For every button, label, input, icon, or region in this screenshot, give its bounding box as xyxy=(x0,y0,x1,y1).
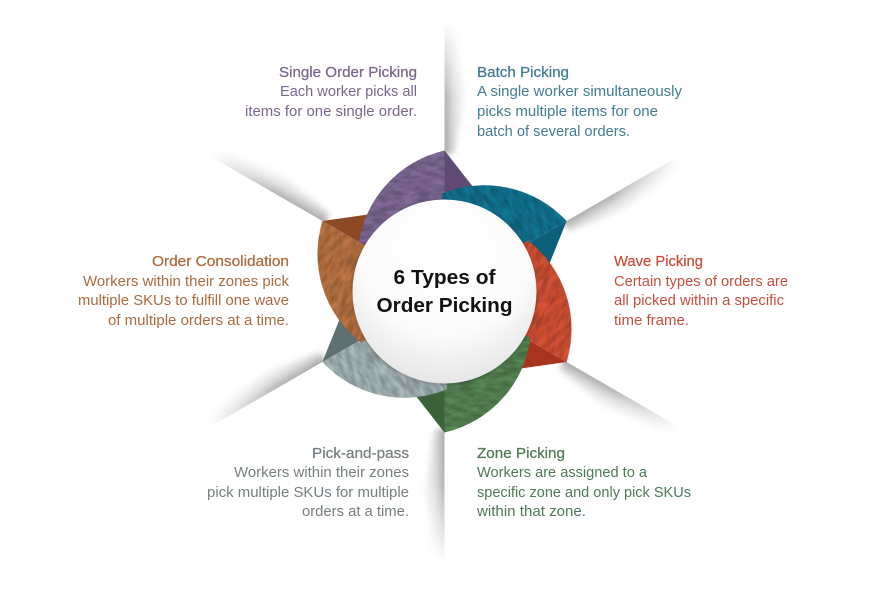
pinwheel diagram xyxy=(279,147,610,436)
blade: orange xyxy=(279,221,419,351)
text block: Pick-and-pass: Workers within their zones xyxy=(234,465,409,481)
text block: Batch Picking: batch of several orders. xyxy=(477,124,630,140)
text block: Wave Picking: all picked within a specific xyxy=(614,293,784,309)
text block: Wave Picking xyxy=(614,254,788,329)
text block: Batch Picking: picks multiple items for one xyxy=(477,104,658,120)
center disc xyxy=(352,200,536,384)
blade: green xyxy=(444,322,530,432)
text block: Pick-and-pass: orders at a time. xyxy=(302,504,409,520)
text block: Pick-and-pass: pick multiple SKUs for multiple xyxy=(207,485,409,501)
title xyxy=(376,267,512,317)
text block: Order Consolidation: of multiple orders at a time. xyxy=(108,313,289,329)
text block: Order Consolidation: Order Consolidation xyxy=(152,254,289,270)
text block: Batch Picking: Batch Picking xyxy=(477,65,569,81)
divider shadows between sections xyxy=(218,30,671,552)
text block: Pick-and-pass xyxy=(207,446,409,520)
fold: teal xyxy=(505,221,581,282)
text block: Zone Picking: Zone Picking xyxy=(477,446,565,462)
text block: Zone Picking: Workers are assigned to a xyxy=(477,465,648,481)
text block: Batch Picking xyxy=(477,65,683,140)
text block: Single Order Picking: items for one single order. xyxy=(245,104,417,120)
blade: teal xyxy=(427,147,567,276)
blade: purple xyxy=(358,150,444,262)
title: 6 Types of xyxy=(394,267,496,289)
fold: green xyxy=(416,362,444,432)
text block: Single Order Picking: Each worker picks all xyxy=(280,84,417,100)
text block: Order Consolidation xyxy=(78,254,290,329)
fold: orange xyxy=(322,196,398,256)
text block: Zone Picking xyxy=(476,446,691,520)
text block: Single Order Picking xyxy=(245,65,417,120)
text block: Wave Picking: time frame. xyxy=(614,313,689,329)
fold: purple xyxy=(444,150,474,222)
fold: grey xyxy=(308,301,384,362)
blade: grey xyxy=(322,306,462,436)
text block: Wave Picking: Wave Picking xyxy=(614,254,703,270)
text block: Batch Picking: A single worker simultaneously xyxy=(477,84,683,100)
title: Order Picking xyxy=(376,295,512,317)
text block: Order Consolidation: Workers within their zones pick xyxy=(83,274,290,290)
text block: Order Consolidation: multiple SKUs to fulfill one wave xyxy=(78,293,289,309)
text block: Wave Picking: Certain types of orders are xyxy=(614,274,788,290)
text block: Single Order Picking: Single Order Picking xyxy=(279,65,417,81)
fold: red xyxy=(491,326,567,387)
text block: Zone Picking: within that zone. xyxy=(476,504,586,520)
blade: red xyxy=(470,232,610,362)
text block: Zone Picking: specific zone and only pick SKUs xyxy=(477,485,691,501)
text block: Pick-and-pass: Pick-and-pass xyxy=(312,446,409,462)
